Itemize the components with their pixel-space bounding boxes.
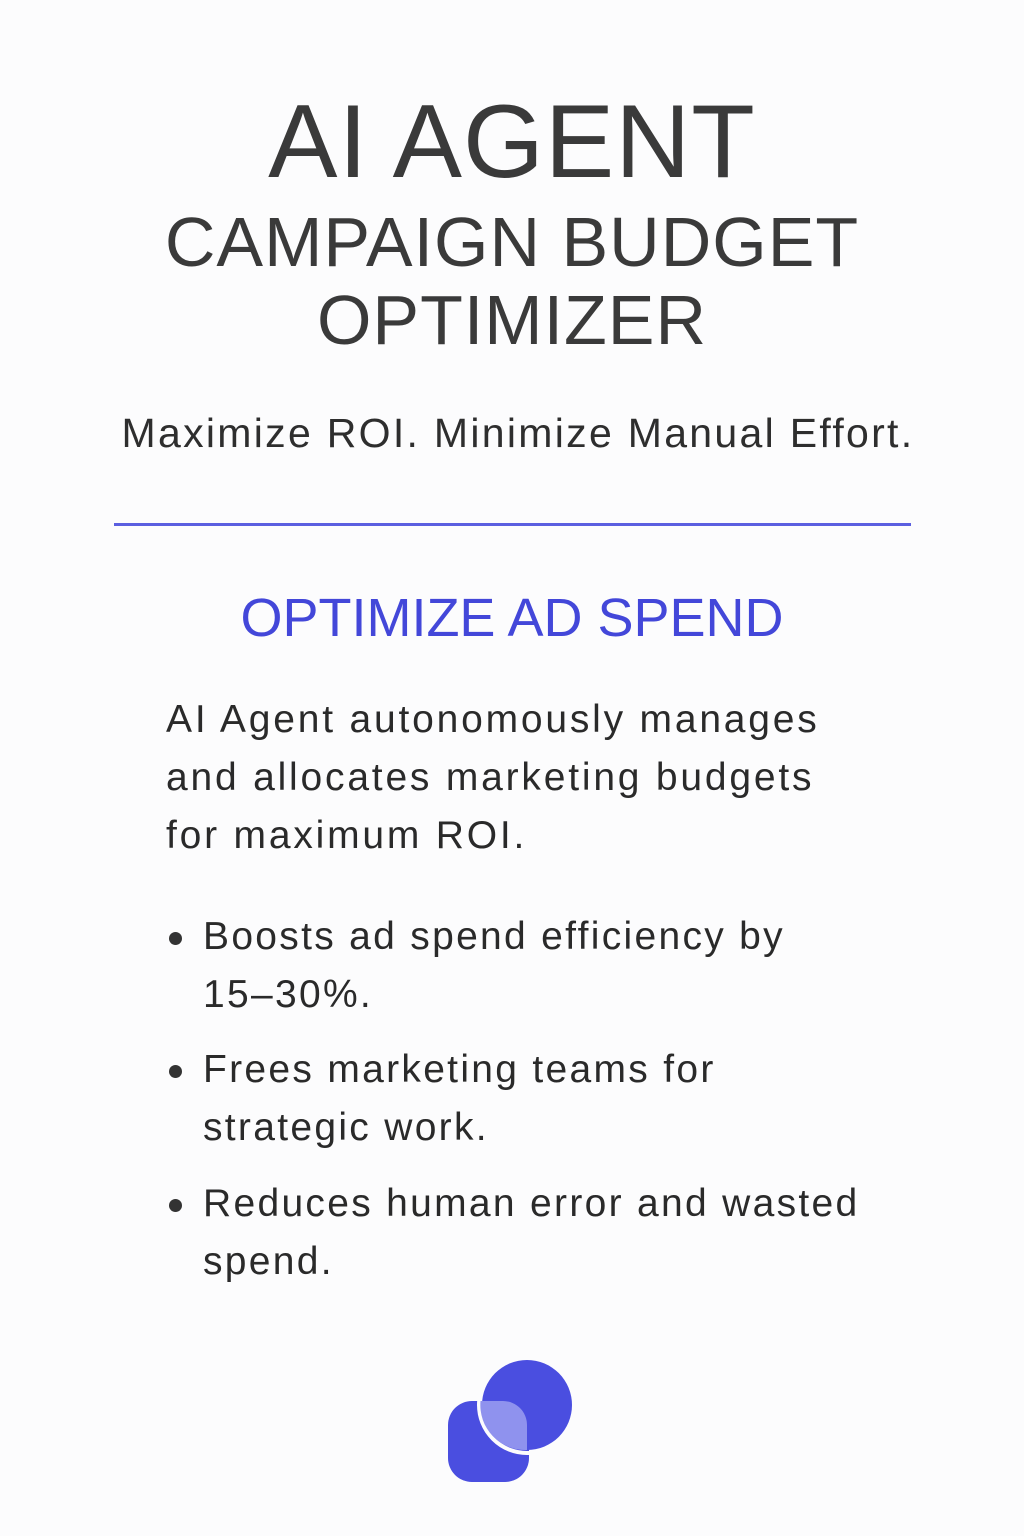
description: and allocates marketing budgets	[166, 756, 814, 799]
description: AI Agent autonomously manages	[166, 698, 820, 741]
icon: logo	[448, 1360, 572, 1482]
bullet 2: Frees marketing teams for	[203, 1048, 716, 1091]
description	[166, 698, 820, 857]
bullet 2	[169, 1048, 716, 1149]
bullet 1: Boosts ad spend efficiency by	[203, 915, 785, 958]
bullet list	[169, 915, 860, 1283]
subtitle heading: CAMPAIGN BUDGET	[165, 203, 859, 281]
bullet 3: spend.	[203, 1240, 334, 1283]
section heading: OPTIMIZE AD SPEND	[240, 588, 784, 648]
bullet 3	[169, 1182, 860, 1283]
divider	[114, 523, 911, 526]
subtitle heading	[165, 203, 859, 359]
tagline: Maximize ROI. Minimize Manual Effort.	[122, 410, 914, 456]
bullet 1: 15–30%.	[203, 973, 373, 1016]
description: for maximum ROI.	[166, 814, 527, 857]
subtitle heading: OPTIMIZER	[317, 281, 707, 359]
bullet 1	[169, 915, 785, 1016]
bullet 3: Reduces human error and wasted	[203, 1182, 860, 1225]
title: AI AGENT	[268, 84, 756, 200]
bullet 2: strategic work.	[203, 1106, 489, 1149]
